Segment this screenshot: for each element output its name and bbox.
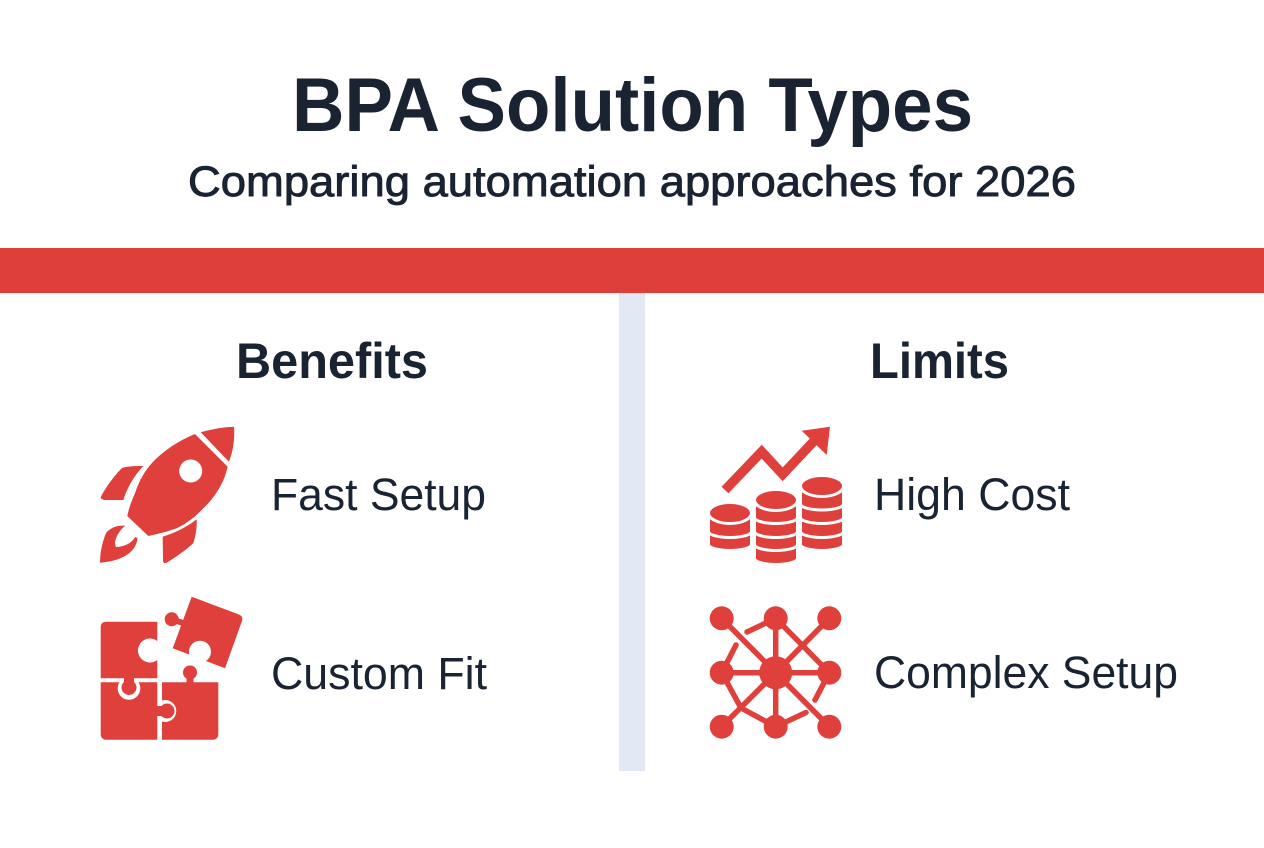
panel: limits [708,333,1178,739]
icon: coins and rising arrow [708,427,844,564]
red band [0,248,1264,293]
icon: rocket [100,427,234,563]
heading: benefits: Benefits [236,333,428,389]
label: complex setup: Complex Setup [874,647,1178,698]
label: high cost: High Cost [874,469,1070,520]
icon: network [710,606,841,739]
title: BPA Solution Types [292,63,973,148]
heading: limits: Limits [870,333,1009,389]
icon: puzzle [101,597,242,740]
label: custom fit: Custom Fit [271,648,487,699]
subtitle: Comparing automation approaches for 2026 [188,158,1076,206]
label: fast setup: Fast Setup [271,469,486,520]
center divider [619,293,645,771]
panel: benefits [100,333,487,740]
